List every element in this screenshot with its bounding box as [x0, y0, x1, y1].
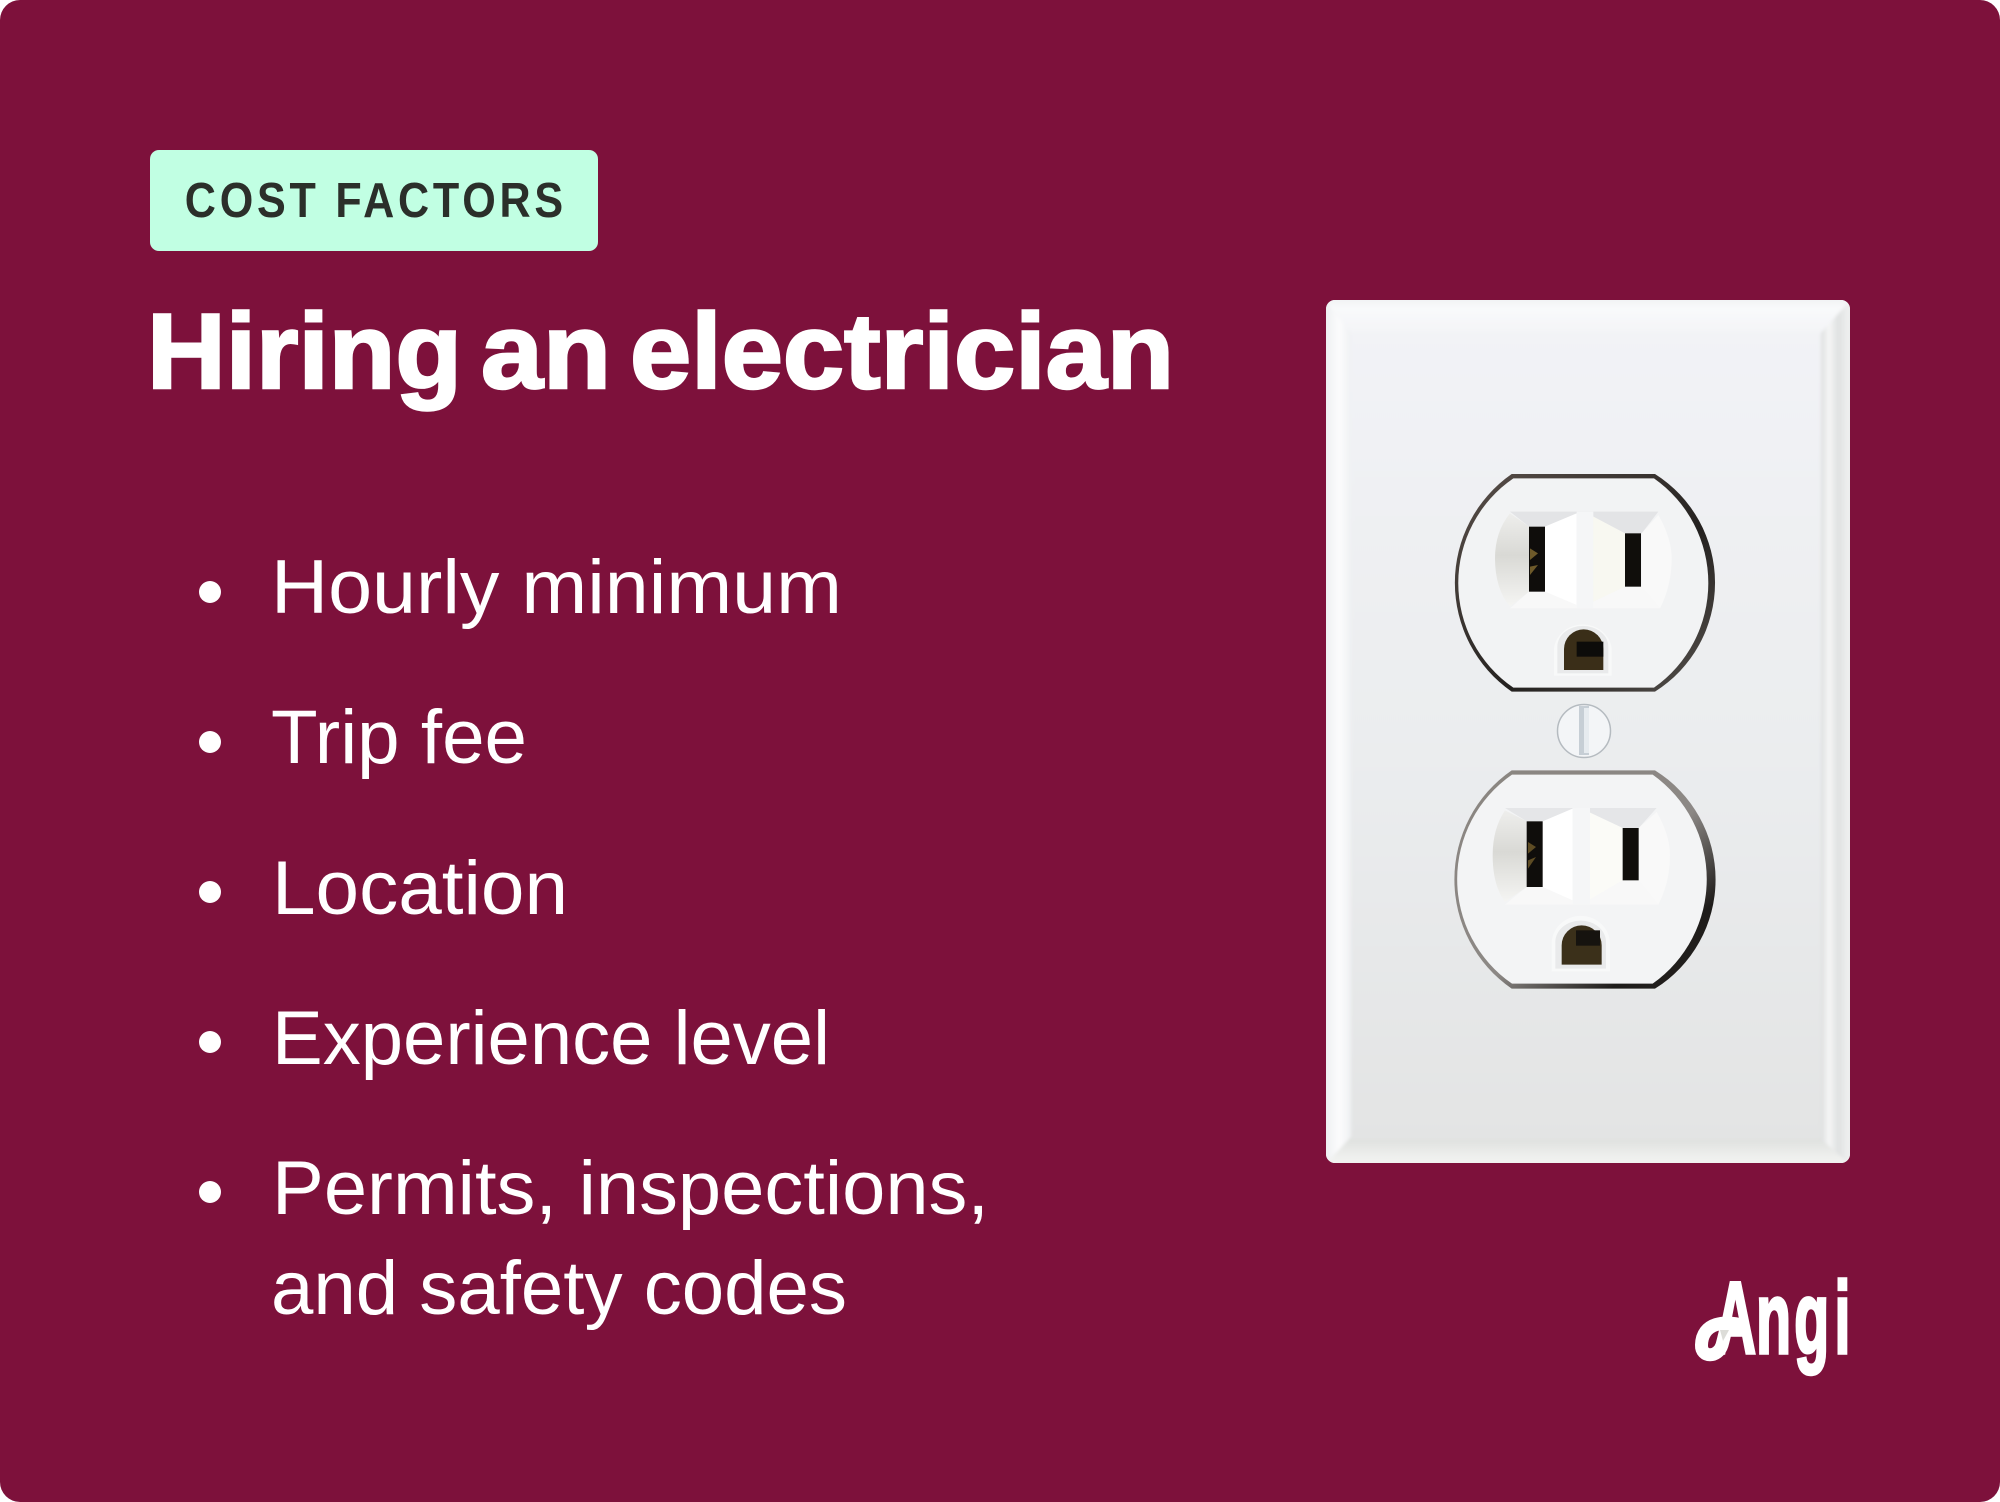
top receptacle — [1455, 474, 1715, 692]
recess facets — [1505, 808, 1657, 828]
title: electrician — [630, 291, 1174, 411]
right slot — [1625, 533, 1641, 587]
left slot — [1527, 821, 1543, 887]
Angi logo: Angi — [1715, 1260, 1850, 1375]
plate body — [1320, 294, 1856, 1170]
list item: experience level: Experience level — [272, 996, 830, 1081]
ground hole — [1554, 625, 1612, 676]
bullet list: cost factors — [199, 545, 989, 1331]
list item: permits, inspections, and safety codes — [199, 1146, 989, 1331]
list item: hourly minimum: Hourly minimum — [271, 545, 842, 630]
ground hole — [1552, 916, 1610, 971]
left slot — [1529, 527, 1545, 592]
badge: cost factors: COST FACTORS — [185, 172, 563, 228]
right slot — [1623, 828, 1639, 880]
list item: permits, inspections, and safety codes: Permits, inspections, — [272, 1146, 989, 1231]
title: Hiring — [147, 291, 462, 411]
list item: trip fee: Trip fee — [271, 695, 527, 780]
list item: location: Location — [272, 846, 568, 931]
title: an — [481, 291, 611, 411]
bottom receptacle — [1454, 770, 1716, 989]
badge: cost factors — [150, 150, 598, 251]
recess facets — [1510, 512, 1658, 533]
title — [147, 291, 1174, 411]
screw — [1558, 704, 1610, 758]
outlet wall plate photo illustration — [1320, 294, 1856, 1170]
list item: permits, inspections, and safety codes: and safety codes — [271, 1246, 847, 1331]
